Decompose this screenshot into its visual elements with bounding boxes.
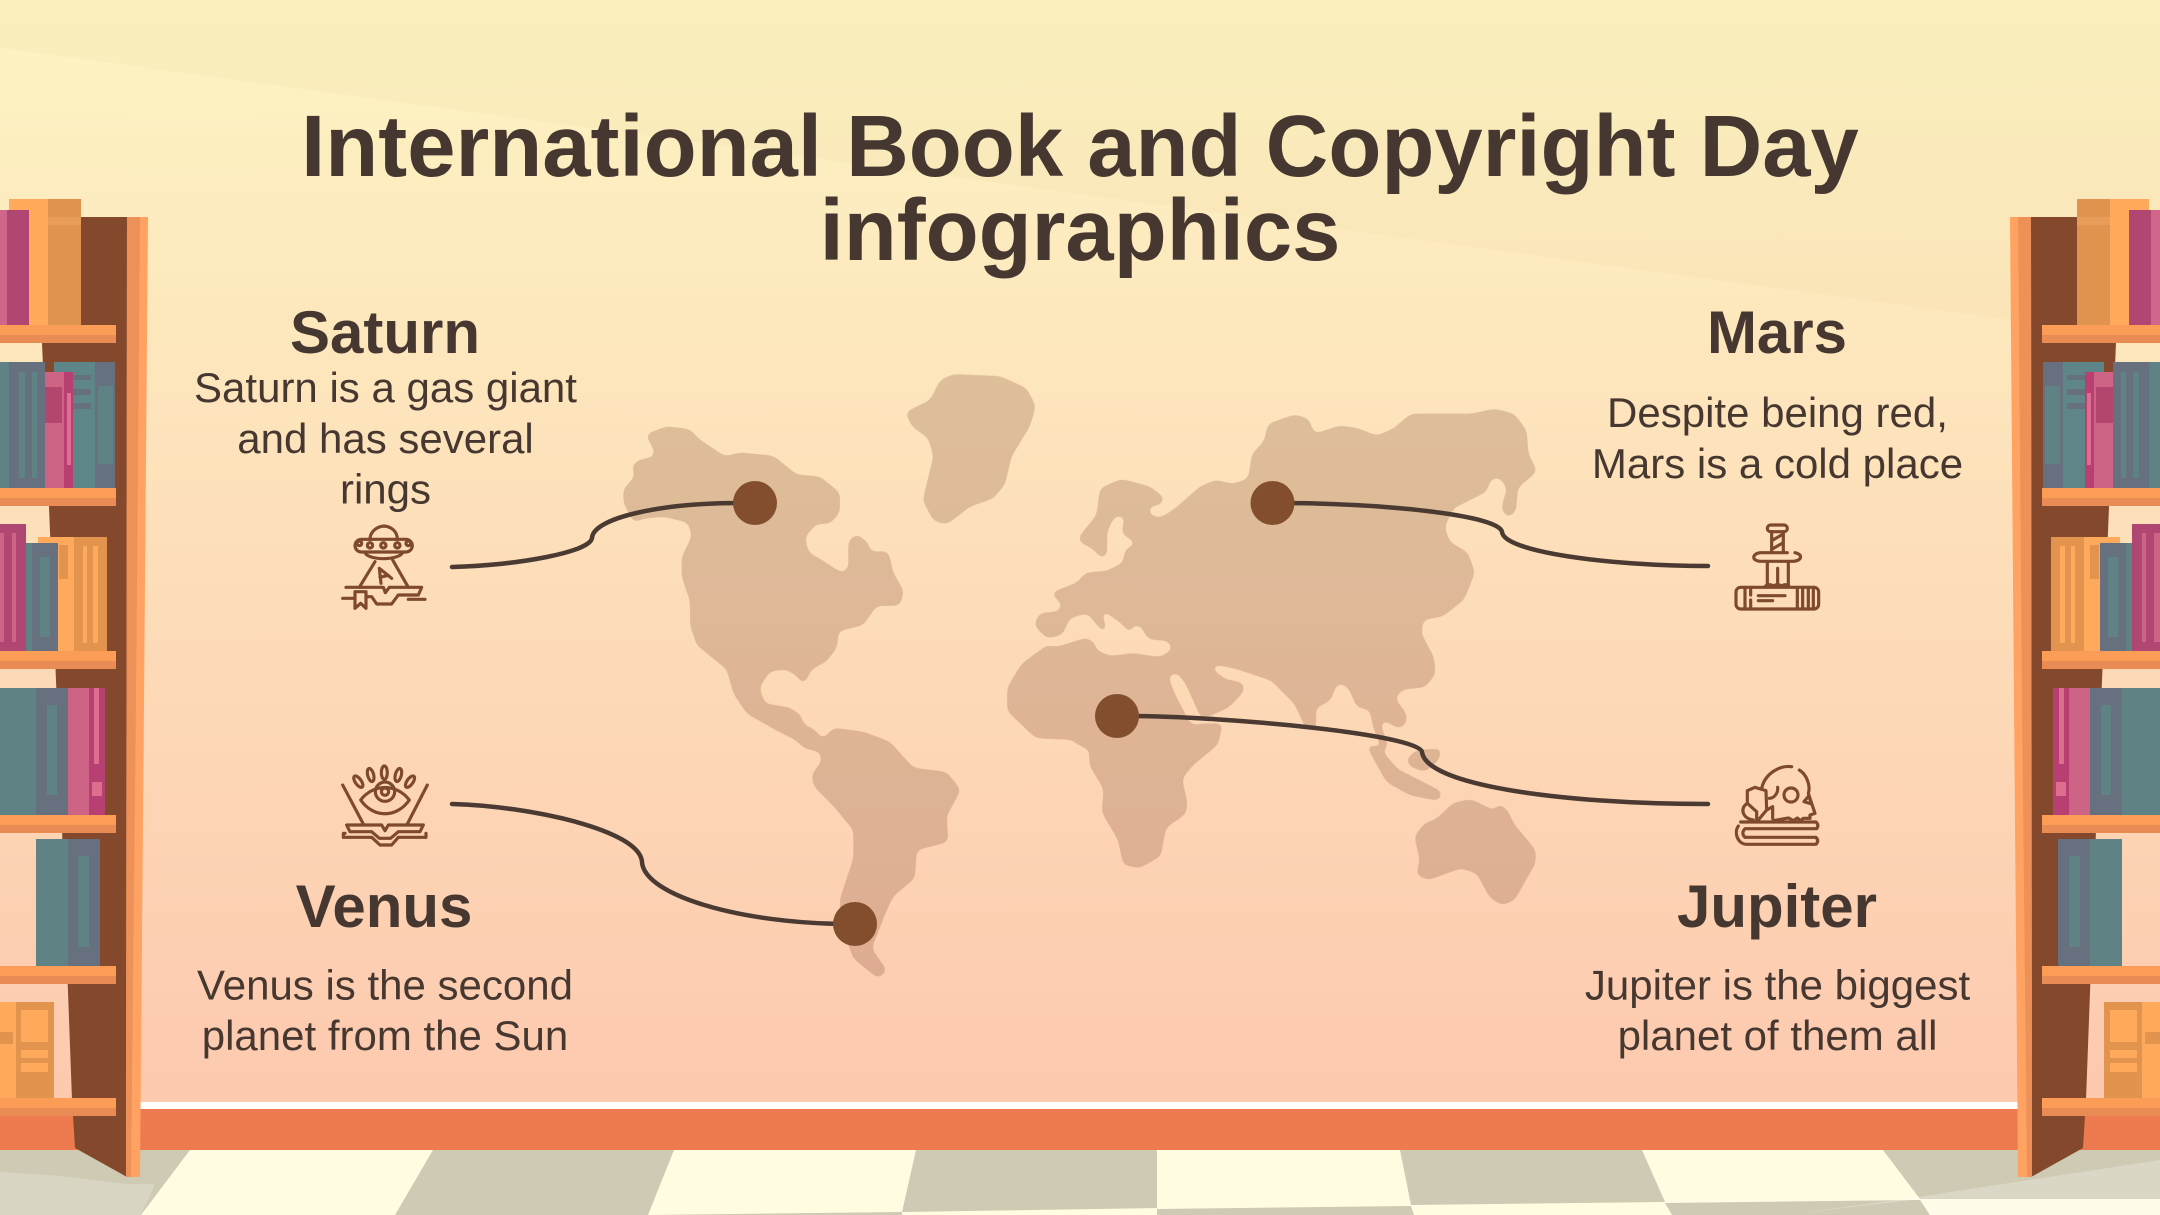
- Jupiter heading: Jupiter: [1677, 873, 1877, 940]
- Venus description: planet from the Sun: [202, 1012, 568, 1059]
- map marker: Saturn: [733, 481, 777, 525]
- map: sumatra and java: [1365, 744, 1442, 801]
- map marker: Mars: [1250, 481, 1294, 525]
- bookcase: right: [2010, 199, 2160, 1177]
- map: borneo: [1405, 748, 1443, 772]
- checkered floor: [0, 1150, 2160, 1215]
- map marker: Venus: [833, 902, 877, 946]
- Mars description: Despite being red,: [1607, 389, 1948, 436]
- icon: skull on book: [1736, 766, 1818, 844]
- books: bottom shelf: [0, 1002, 54, 1098]
- Saturn description: Saturn is a gas giant: [194, 364, 577, 411]
- connector: Saturn: [452, 503, 740, 567]
- Mars heading: Mars: [1707, 299, 1847, 366]
- books: fifth shelf: [36, 839, 100, 966]
- floor reflection: left: [0, 1172, 155, 1215]
- map marker: Jupiter: [1095, 694, 1139, 738]
- books: second shelf: [0, 362, 115, 488]
- Saturn description: and has several: [237, 415, 534, 462]
- floor reflection: right: [1787, 1160, 2160, 1215]
- map: americas: [623, 426, 961, 979]
- icon: sword in book: [1736, 525, 1819, 609]
- title: infographics: [820, 182, 1340, 279]
- bookcase side board shade: [126, 217, 140, 1177]
- map: eurasia and africa: [1007, 409, 1537, 868]
- connector: Venus: [452, 804, 850, 924]
- white wall trim: [100, 1102, 2060, 1110]
- Saturn heading: Saturn: [290, 299, 480, 366]
- icon: eye over book: [343, 766, 427, 845]
- connector: Jupiter: [1125, 716, 1708, 804]
- books: fourth shelf: [0, 688, 105, 815]
- bookcase: left: [0, 199, 148, 1177]
- icon: ufo over book: [343, 526, 425, 608]
- map: australia: [1414, 799, 1536, 906]
- books: third shelf: [0, 524, 107, 651]
- bookcase back panel: [42, 217, 127, 1177]
- Mars description: Mars is a cold place: [1592, 440, 1963, 487]
- world map: [623, 374, 1537, 979]
- Jupiter description: planet of them all: [1618, 1012, 1937, 1059]
- wall light wedge: [0, 0, 2160, 340]
- shelves: [0, 325, 116, 1116]
- bookcase side board: [126, 217, 148, 1177]
- Venus description: Venus is the second: [197, 962, 573, 1008]
- title: International Book and Copyright Day: [301, 98, 1859, 195]
- books: top shelf: [0, 199, 81, 325]
- map: greenland: [905, 374, 1036, 525]
- Venus heading: Venus: [296, 873, 472, 940]
- orange baseboard: [0, 1109, 2160, 1150]
- connector: Mars: [1280, 503, 1708, 566]
- Jupiter description: Jupiter is the biggest: [1585, 962, 1970, 1008]
- Saturn description: rings: [340, 466, 431, 512]
